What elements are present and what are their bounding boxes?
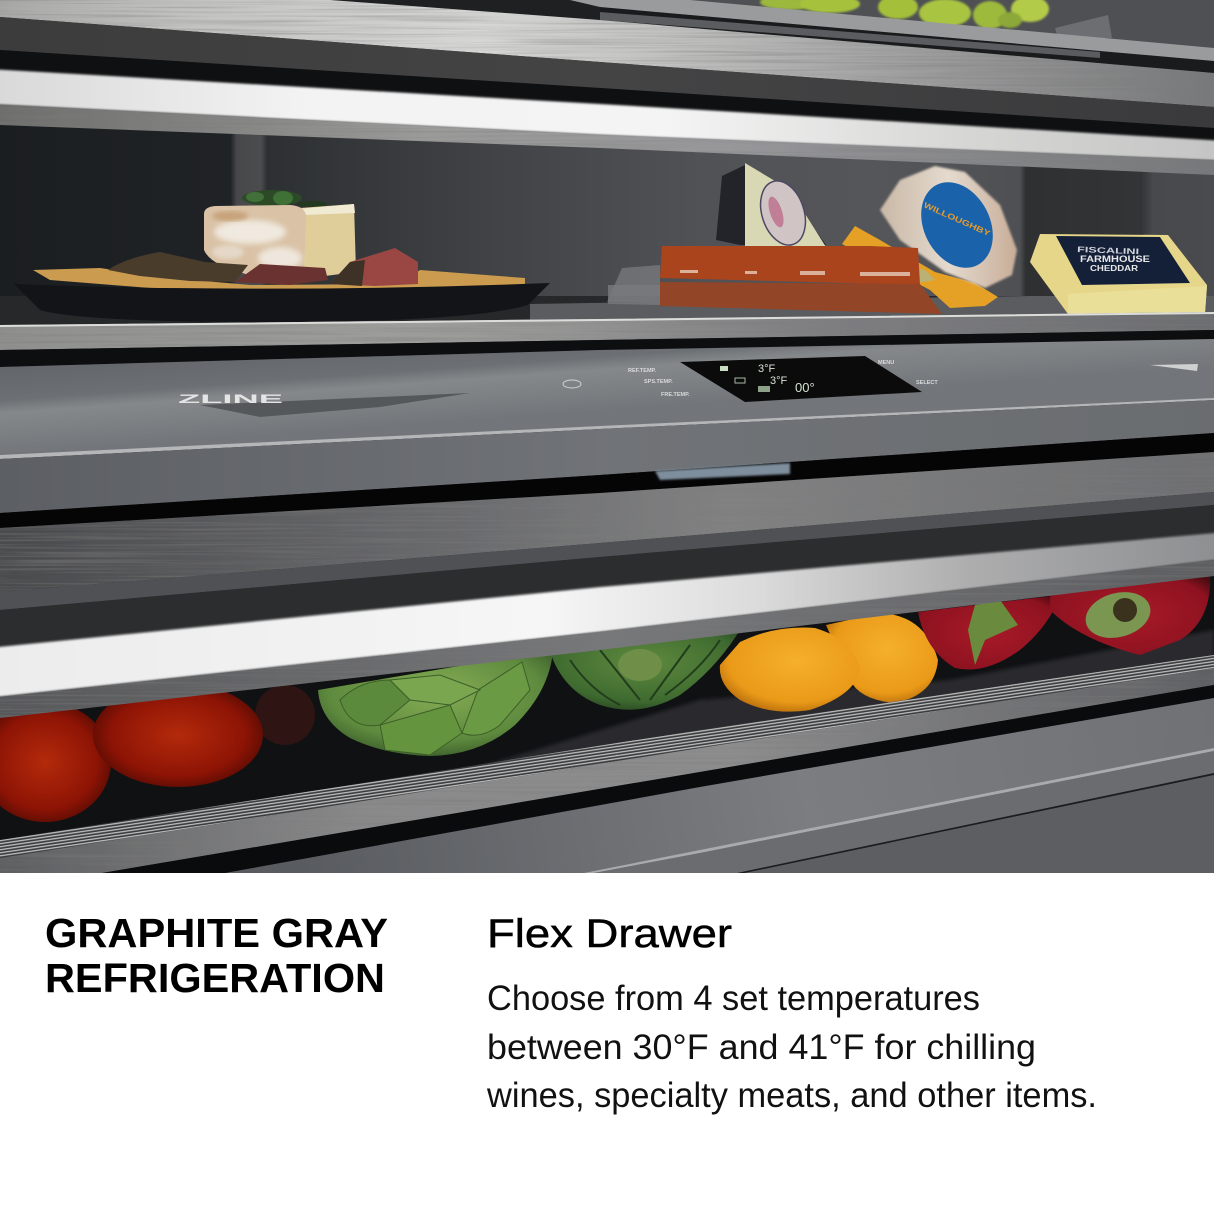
heading: Graphite Gray Refrigeration: GRAPHITE GRAY [45,910,388,956]
button labels: SELECT [916,380,938,386]
description text: wines, specialty meats, and other items. [486,1076,1097,1115]
lower drawer interior [0,560,1214,845]
control panel glass [0,339,1214,457]
description text: Choose from 4 set temperatures [487,979,980,1018]
shelf rail [0,312,1214,350]
artichokes [318,630,740,756]
button labels [628,360,938,398]
temperature display: 3°F [758,363,776,375]
heading: Graphite Gray Refrigeration [45,910,388,1001]
brushed rail [0,452,1214,592]
dragon fruits [918,575,1210,670]
bracket [1055,15,1112,38]
button labels: REF.TEMP. [628,368,656,374]
Willoughby round cheese: WILLOUGHBY [922,201,992,238]
brushed lip [0,668,1214,873]
dark gap above control panel [0,330,1214,367]
top drawer with grapes [570,0,1214,73]
Farmhouse cheddar block [1030,234,1207,314]
icon: power button [563,380,581,388]
crusted salami [108,252,248,282]
temperature display: 3°F [770,375,788,387]
wedge of orange cheese [842,226,998,308]
graphite drawer face [0,400,1214,513]
dark gap [0,433,1214,528]
herbs [242,190,327,207]
plated cheese and charcuterie [14,190,550,322]
large polished drawer rail [0,532,1214,718]
cheese wheel [204,204,356,278]
dark gap below lip [102,685,1214,873]
product photo: refrigerator drawers [0,0,1214,873]
description text: between 30°F and 41°F for chilling [487,1028,1036,1067]
white text area [0,873,1214,1214]
ribbed strip [0,655,1214,858]
temperature display: 00° [795,380,815,395]
crackers [33,268,525,289]
goat cheese wedge [716,163,826,251]
upper silver rail [0,0,1214,107]
plate [14,283,550,322]
Willoughby round cheese [880,166,1017,288]
Farmhouse cheddar block: FARMHOUSE [1080,254,1150,264]
interior back wall [0,120,1214,330]
subheading: Flex Drawer: Flex Drawer [487,912,732,956]
peppers [0,683,315,822]
panel edge highlight [0,398,1214,459]
button labels: SPS.TEMP. [644,379,673,385]
button labels: MENU [878,360,894,366]
heading: Graphite Gray Refrigeration: REFRIGERATION [45,955,385,1001]
button labels: FRE.TEMP. [661,392,690,398]
Farmhouse cheddar block: FISCALINI [1077,245,1139,256]
temperature display [680,356,922,402]
logo: ZLINE: ZLINE [178,392,283,406]
blue reflection in gap [655,463,790,480]
shelf floor [0,296,1214,328]
bright rail [0,69,1214,175]
dark gap below upper rail [0,17,1214,142]
Farmhouse cheddar block: CHEDDAR [1090,264,1138,273]
mangoes [720,613,938,712]
vacuum-sealed meat block [607,246,942,314]
description text [486,979,1097,1115]
dark channel [0,492,1214,647]
lower gray panels [225,698,1214,873]
